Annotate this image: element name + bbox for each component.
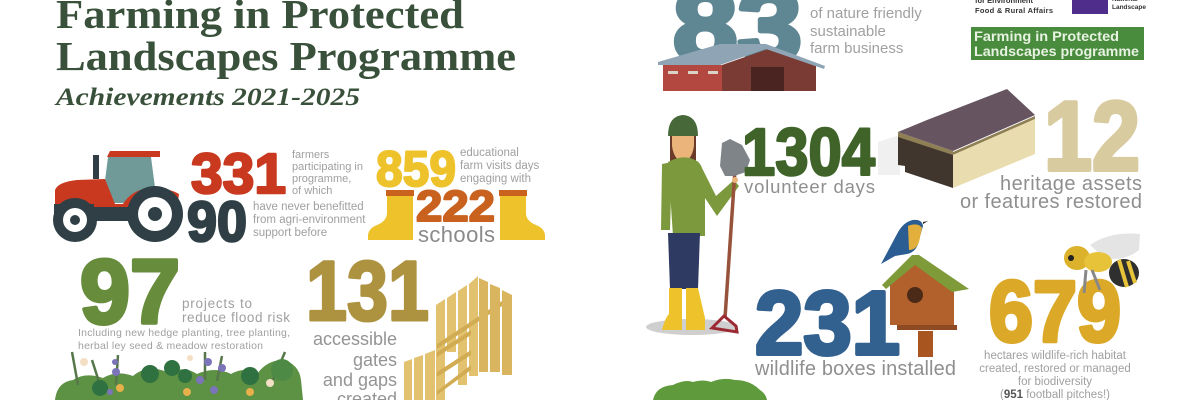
icon: barn [658, 44, 825, 91]
stat: 1304 volunteer days: volunteer days [744, 176, 875, 197]
stat: 859 farm visits [376, 141, 539, 197]
icon: right boot [499, 190, 545, 240]
stat: 222 schools: schools [418, 222, 495, 247]
stat: 12 heritage assets: 12 [1044, 81, 1140, 191]
stat: 131 accessible gates: accessible [313, 329, 397, 349]
stat: 131 accessible gates: and gaps [323, 370, 397, 390]
stat: 97 flood risk projects [78, 242, 290, 352]
stat: 131 accessible gates: 131 [306, 244, 429, 338]
illustration: bush [653, 379, 767, 400]
stat: 679 hectares: created, restored or managed [979, 363, 1131, 375]
stat: 83 farm businesses [673, 0, 922, 83]
title [56, 0, 516, 79]
logo: National Landscape [1072, 0, 1146, 14]
stat: 331 farmers: of which [292, 185, 332, 197]
stat: 331 farmers: farmers [292, 149, 330, 161]
icon: tractor [53, 151, 183, 242]
icon: left boot [368, 190, 414, 240]
stat: 90 never benefitted [187, 190, 366, 254]
logo: Defra [975, 0, 1053, 15]
stat: 679 hectares: 679 [989, 264, 1121, 360]
stat: 97 flood risk projects: reduce flood risk [182, 310, 290, 325]
stat: 679 hectares: hectares wildlife-rich habitat [984, 350, 1127, 362]
badge: programme name [971, 27, 1144, 60]
stat: 679 hectares: for biodiversity [1018, 376, 1092, 388]
logo: Defra: Food & Rural Affairs [975, 6, 1053, 15]
stat: 90 never benefitted: 90 [187, 190, 247, 254]
stat: 131 accessible gates: gates [353, 350, 397, 370]
icon: heritage building [878, 89, 1035, 188]
stat: 859 farm visits: educational [460, 147, 519, 159]
icon: wooden gate and fence [404, 276, 512, 400]
stat: 859 farm visits: farm visits days [460, 160, 539, 172]
stat: 859 farm visits: engaging with [460, 173, 531, 185]
stat: 679 hectares [979, 264, 1131, 400]
illustration: flower bed [55, 352, 303, 400]
stat: 331 farmers: participating in [292, 161, 363, 173]
stat: 222 schools: 222 [416, 182, 495, 231]
logo: National Landscape: Landscape [1112, 4, 1146, 11]
badge: programme name: Landscapes programme [974, 43, 1139, 59]
stat: 90 never benefitted: support before [253, 227, 327, 239]
stat: 90 never benefitted: from agri-environment [253, 214, 366, 226]
stat: 97 flood risk projects: herbal ley seed & meadow restoration [78, 340, 263, 352]
stat: 83 farm businesses: farm business [810, 40, 903, 57]
stat: 1304 volunteer days: 1304 [742, 115, 875, 190]
icon: blue bird [881, 220, 928, 264]
icon: bee [1064, 233, 1140, 293]
badge: programme name: Farming in Protected [974, 28, 1119, 44]
stat: 90 never benefitted: have never benefitted [253, 201, 364, 213]
stat: 231 wildlife boxes: 231 [755, 274, 900, 374]
icon: bird box [882, 255, 969, 357]
stat: 331 farmers: 331 [191, 142, 286, 206]
stat: 97 flood risk projects: projects to [182, 296, 252, 311]
stat: 131 accessible gates [306, 244, 429, 400]
stat: 331 farmers [191, 142, 363, 206]
stat: 331 farmers: programme, [292, 173, 351, 185]
stat: 12 heritage assets: or features restored [960, 191, 1142, 213]
title: Landscapes Programme [56, 33, 516, 79]
stat: 12 heritage assets [960, 81, 1142, 213]
subtitle: Achievements 2021-2025 [54, 84, 360, 111]
stat: 12 heritage assets: heritage assets [1000, 173, 1142, 195]
stat: 83 farm businesses: sustainable [810, 23, 886, 40]
stat: 83 farm businesses: of nature friendly [810, 5, 922, 22]
stat: 859 farm visits: 859 [376, 141, 456, 197]
stat: 97 flood risk projects: 97 [80, 242, 180, 343]
stat: 97 flood risk projects: Including new hedge planting, tree planting, [78, 327, 290, 339]
illustration: farmer with spade [646, 115, 750, 335]
stat: 231 wildlife boxes: wildlife boxes installed [754, 358, 956, 380]
